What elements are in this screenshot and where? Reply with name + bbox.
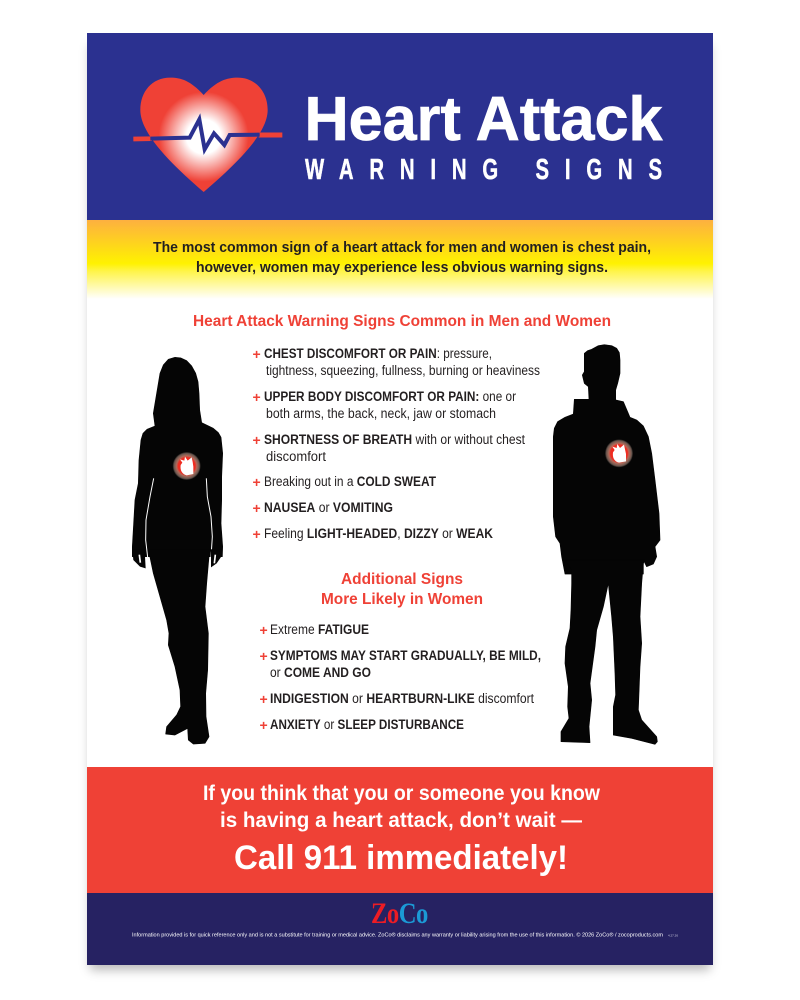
silhouette: man <box>553 345 660 744</box>
call to action panel <box>87 767 713 893</box>
item: shortness of breath: SHORTNESS OF BREATH with or without chest <box>264 432 525 447</box>
silhouette: woman <box>132 357 223 744</box>
item: upper body discomfort: + <box>252 389 261 405</box>
call to action text line 1: If you think that you or someone you know <box>203 782 601 805</box>
intro text line 1: The most common sign of a heart attack for men and women is chest pain, <box>153 239 651 256</box>
list: common warning signs <box>252 346 540 542</box>
call to action text line 2: is having a heart attack, don’t wait — <box>220 809 582 832</box>
item: chest discomfort <box>252 346 540 378</box>
item: cold sweat: + <box>252 474 261 490</box>
item: upper body discomfort <box>252 389 516 421</box>
item: gradual symptoms: or COME AND GO <box>270 665 371 680</box>
item: shortness of breath: + <box>252 432 261 448</box>
item: fatigue: Extreme FATIGUE <box>270 622 369 637</box>
icon: chest heart on man <box>605 439 633 467</box>
logo: ZoCo: ZoCo <box>371 897 428 930</box>
title: Heart Attack <box>304 85 663 154</box>
subtitle: WARNING SIGNS <box>305 154 662 186</box>
item: upper body discomfort: UPPER BODY DISCOMFORT OR PAIN: one or <box>264 389 516 404</box>
item: gradual symptoms: + <box>260 648 268 664</box>
icon: heart with pulse line <box>133 78 282 192</box>
item: cold sweat: Breaking out in a COLD SWEAT <box>264 474 437 489</box>
item: shortness of breath: discomfort <box>266 449 326 464</box>
item: anxiety: ANXIETY or SLEEP DISTURBANCE <box>270 717 464 732</box>
item: nausea: + <box>252 500 261 516</box>
item: chest discomfort: CHEST DISCOMFORT OR PAIN: pressure, <box>264 346 492 361</box>
heading: additional signs <box>321 571 483 608</box>
item: gradual symptoms <box>260 648 541 680</box>
item: gradual symptoms: SYMPTOMS MAY START GRADUALLY, BE MILD, <box>270 648 541 663</box>
header banner <box>87 33 713 220</box>
item: anxiety: + <box>260 717 268 733</box>
heading: additional signs: More Likely in Women <box>321 591 483 608</box>
item: nausea: NAUSEA or VOMITING <box>264 500 393 515</box>
version code: 4.27.26 <box>668 934 678 938</box>
item: indigestion: INDIGESTION or HEARTBURN-LIKE discomfort <box>270 691 534 706</box>
call to action headline: Call 911 immediately! <box>234 839 568 877</box>
disclaimer: Information provided is for quick reference only and is not a substitute for training or medical advice. ZoCo® disclaims any warranty or liability arising from the use of this information. © 2026 ZoCo® / zocoproducts.com <box>132 932 663 938</box>
item: fatigue: + <box>260 622 268 638</box>
item: indigestion: + <box>260 691 268 707</box>
intro text line 2: however, women may experience less obvious warning signs. <box>196 259 608 276</box>
item: light-headed: Feeling LIGHT-HEADED, DIZZY or WEAK <box>264 526 493 541</box>
list: additional signs in women <box>260 622 541 733</box>
item: upper body discomfort: both arms, the back, neck, jaw or stomach <box>266 406 496 421</box>
item: chest discomfort: tightness, squeezing, fullness, burning or heaviness <box>266 363 540 378</box>
icon: chest heart on woman <box>173 452 201 480</box>
item: light-headed: + <box>252 526 261 542</box>
item: chest discomfort: + <box>252 346 261 362</box>
footer panel <box>87 893 713 965</box>
heading: common signs: Heart Attack Warning Signs Common in Men and Women <box>193 313 611 330</box>
heading: additional signs: Additional Signs <box>341 571 463 588</box>
intro gradient band <box>87 220 713 299</box>
poster background <box>87 33 713 965</box>
item: shortness of breath <box>252 432 525 464</box>
